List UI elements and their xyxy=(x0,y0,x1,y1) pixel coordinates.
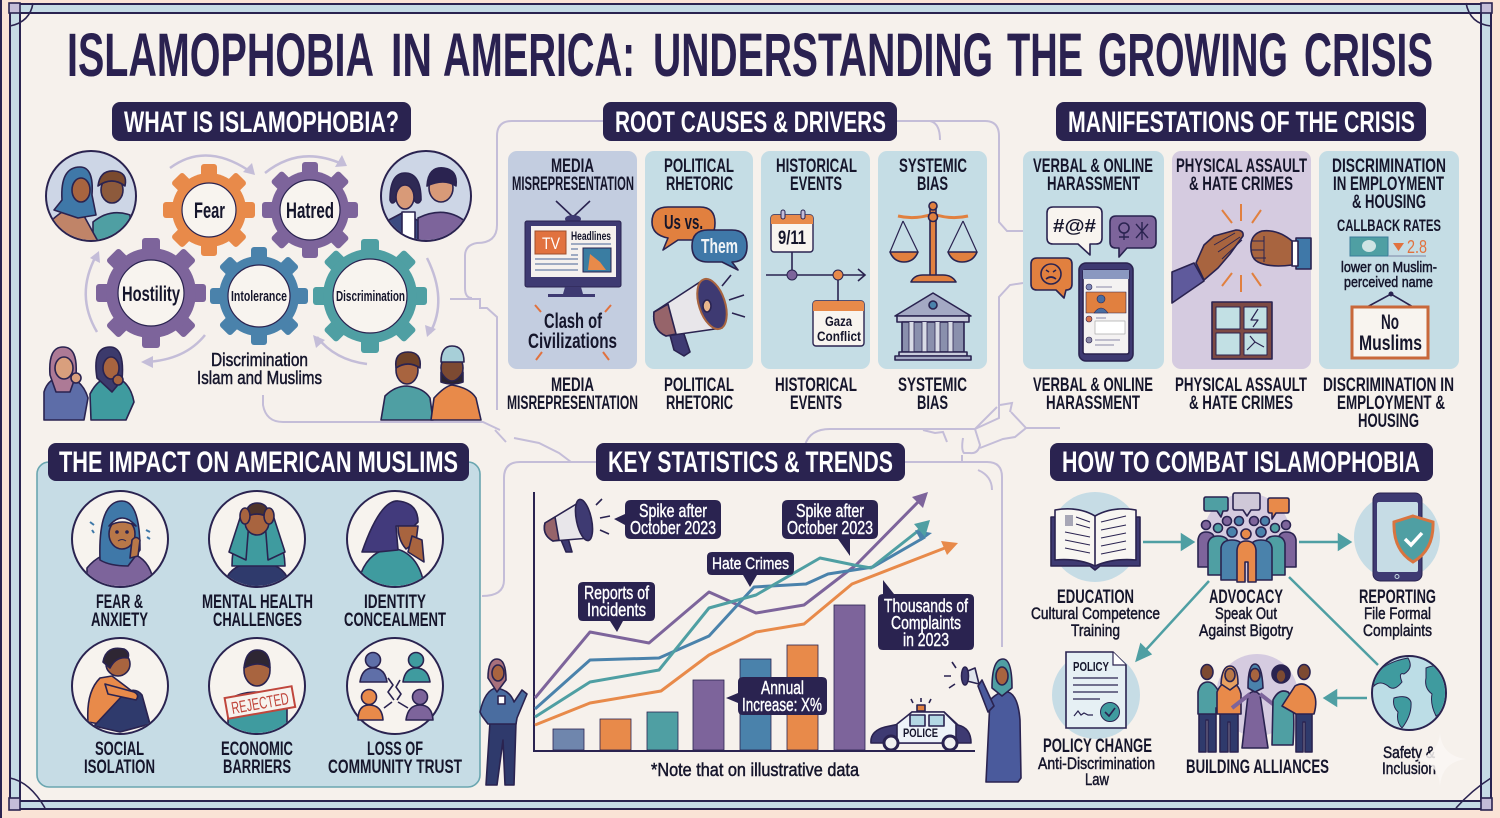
gear: discrimination xyxy=(313,239,427,353)
captions under root causes: MEDIA xyxy=(551,375,594,396)
gear: hatred xyxy=(262,162,358,258)
definition text xyxy=(197,349,322,388)
callout: reports of incidents: Reports of xyxy=(584,583,650,603)
captions under manifestations: DISCRIMINATION IN xyxy=(1323,375,1454,396)
panel: verbal and online harassment: VERBAL & ONLINE xyxy=(1033,156,1153,177)
callback rate figure xyxy=(1350,237,1427,257)
callout: spike right xyxy=(782,500,878,556)
captions under root causes: BIAS xyxy=(917,393,948,414)
panel: historical events: EVENTS xyxy=(790,174,842,195)
title: IN xyxy=(391,21,432,89)
figure: woman with megaphone xyxy=(944,659,1021,782)
captions under root causes: EVENTS xyxy=(790,393,842,414)
timeline with dates: Gaza xyxy=(825,313,852,329)
gear: intolerance: Intolerance xyxy=(231,289,287,305)
icon: courthouse xyxy=(895,293,971,360)
callout: spike left: October 2023 xyxy=(630,518,716,538)
icon: advocacy crowd: Speak Out xyxy=(1215,604,1277,623)
panel: political rhetoric: POLITICAL xyxy=(664,156,734,177)
icon: policy document: POLICY CHANGE xyxy=(1043,736,1152,757)
captions under manifestations: HARASSMENT xyxy=(1046,393,1140,414)
panel: political rhetoric xyxy=(645,151,753,369)
icon: broken window xyxy=(1212,302,1272,359)
item: identity concealment xyxy=(344,491,446,631)
item: social isolation: SOCIAL xyxy=(95,739,144,760)
item: loss of community trust: COMMUNITY TRUST xyxy=(328,757,462,778)
panel: systemic bias xyxy=(878,151,987,369)
panel: discrimination in employment and housing: lower on Muslim- xyxy=(1341,259,1437,276)
panel: systemic bias: BIAS xyxy=(917,174,948,195)
figures: two men xyxy=(381,346,481,420)
panel: discrimination in employment and housing xyxy=(1319,151,1459,369)
header: what is islamophobia xyxy=(112,102,411,141)
icon: advocacy crowd: ADVOCACY xyxy=(1209,587,1283,608)
captions under manifestations: VERBAL & ONLINE xyxy=(1033,375,1153,396)
panel: media misrepresentation xyxy=(508,151,637,369)
callout: reports of incidents xyxy=(578,582,655,632)
captions under manifestations: & HATE CRIMES xyxy=(1189,393,1293,414)
item: fear and anxiety: ANXIETY xyxy=(91,610,148,631)
timeline with dates: Conflict xyxy=(817,328,861,344)
callout: annual increase: Annual xyxy=(761,678,804,698)
header: root causes xyxy=(603,102,897,141)
callout: annual increase xyxy=(726,677,827,715)
icon: speech bubbles xyxy=(1031,207,1156,298)
panel: physical assault and hate crimes: & HATE CRIMES xyxy=(1189,174,1293,195)
callout: annual increase: Increase: X% xyxy=(742,695,822,715)
icon: policy document: Anti-Discrimination xyxy=(1038,754,1155,773)
panel: discrimination in employment and housing: & HOUSING xyxy=(1352,192,1426,213)
icon: reporting phone xyxy=(1354,493,1440,640)
item: fear and anxiety: FEAR & xyxy=(96,592,143,613)
bars xyxy=(553,605,865,750)
item: mental health challenges xyxy=(202,491,313,631)
panel: discrimination in employment and housing: perceived name xyxy=(1344,274,1433,291)
timeline with dates: 9/11 xyxy=(778,228,806,249)
icon: us vs them bubbles: Us vs. xyxy=(664,212,703,234)
gear: fear: Fear xyxy=(194,198,225,223)
panel: media misrepresentation: Civilizations xyxy=(528,330,617,353)
item: economic barriers: REJECTED xyxy=(230,689,290,718)
panel: verbal and online harassment xyxy=(1023,151,1164,369)
captions under manifestations: PHYSICAL ASSAULT xyxy=(1175,375,1307,396)
icon: reporting phone: File Formal xyxy=(1364,604,1431,623)
icon: megaphone xyxy=(654,275,745,356)
gear: hostility xyxy=(96,238,206,348)
icon: education book: EDUCATION xyxy=(1057,587,1134,608)
icon: advocacy crowd: Against Bigotry xyxy=(1199,621,1293,640)
panel: discrimination in employment and housing: IN EMPLOYMENT xyxy=(1333,174,1444,195)
icon: building alliances xyxy=(1186,654,1329,778)
captions under manifestations: HOUSING xyxy=(1358,411,1419,432)
icon: no muslims sign: No xyxy=(1381,311,1399,334)
trend lines xyxy=(535,492,958,725)
item: loss of community trust: LOSS OF xyxy=(367,739,423,760)
gear: fear xyxy=(163,164,255,256)
connector lines xyxy=(263,121,1060,647)
panel: impact on american muslims xyxy=(37,443,480,787)
callout: hate crimes: Hate Crimes xyxy=(712,554,789,573)
callout: spike right: Spike after xyxy=(796,501,864,521)
chart: key statistics and trends xyxy=(480,492,1021,785)
title: THE xyxy=(1007,21,1083,89)
axes xyxy=(534,492,975,751)
captions under root causes: HISTORICAL xyxy=(775,375,857,396)
panel: how to combat xyxy=(1031,492,1466,789)
icon: policy document: POLICY xyxy=(1073,660,1110,674)
icon: no muslims sign: Muslims xyxy=(1359,332,1422,355)
icon: no muslims sign xyxy=(1352,292,1428,358)
icon: globe: Safety & xyxy=(1383,743,1436,762)
panel: discrimination in employment and housing: DISCRIMINATION xyxy=(1332,156,1446,177)
captions under root causes: MISREPRESENTATION xyxy=(507,393,638,414)
icon: policy document: Law xyxy=(1085,770,1110,789)
item: social isolation: ISOLATION xyxy=(84,757,155,778)
captions under root causes: POLITICAL xyxy=(664,375,734,396)
callout: thousands of complaints: Complaints xyxy=(891,613,961,633)
callout: thousands of complaints: in 2023 xyxy=(903,630,949,650)
icon: police car xyxy=(871,698,971,750)
icon: globe xyxy=(1372,656,1448,778)
callout: spike left xyxy=(614,500,721,539)
figure: woman with phone xyxy=(480,659,527,785)
panel: discrimination in employment and housing: CALLBACK RATES xyxy=(1337,216,1441,235)
captions under root causes xyxy=(507,375,967,414)
icon: reporting phone: Complaints xyxy=(1363,621,1432,640)
callback rate figure: 2.8 xyxy=(1407,237,1427,257)
gear: discrimination: Discrimination xyxy=(336,289,405,305)
title xyxy=(67,21,1433,89)
captions under manifestations xyxy=(1033,375,1454,432)
callout: spike left: Spike after xyxy=(639,501,707,521)
portrait: couple xyxy=(381,151,471,247)
callout: spike right: October 2023 xyxy=(787,518,873,538)
icon: education book xyxy=(1031,492,1160,640)
panel: political rhetoric: RHETORIC xyxy=(666,174,733,195)
item: mental health challenges: MENTAL HEALTH xyxy=(202,592,313,613)
sparkle watermark xyxy=(1414,733,1466,786)
item: social isolation xyxy=(72,638,168,778)
captions under root causes: SYSTEMIC xyxy=(898,375,967,396)
note: *Note that on illustrative data xyxy=(651,759,860,780)
icon: megaphone small xyxy=(544,498,610,552)
icon: hand and fist xyxy=(1172,230,1311,303)
item: loss of community trust xyxy=(328,638,462,778)
definition text: Discrimination xyxy=(211,349,308,370)
panel: systemic bias: SYSTEMIC xyxy=(899,156,967,177)
item: identity concealment: IDENTITY xyxy=(364,592,426,613)
icon: education book: Cultural Competence xyxy=(1031,604,1160,623)
item: identity concealment: CONCEALMENT xyxy=(344,610,446,631)
panel: verbal and online harassment: HARASSMENT xyxy=(1047,174,1140,195)
icon: reporting phone: REPORTING xyxy=(1359,587,1436,608)
title: GROWING xyxy=(1098,21,1288,89)
icon: television: TV xyxy=(542,234,561,253)
callout: thousands of complaints xyxy=(878,580,974,650)
captions under root causes: RHETORIC xyxy=(666,393,733,414)
item: economic barriers: BARRIERS xyxy=(223,757,291,778)
icon: television: Headlines xyxy=(571,231,611,243)
timeline with dates xyxy=(766,210,865,346)
panel: media misrepresentation: MEDIA xyxy=(551,156,594,177)
icon: scales of justice xyxy=(890,202,977,282)
gear: intolerance xyxy=(210,247,308,345)
icon: building alliances: BUILDING ALLIANCES xyxy=(1186,757,1329,778)
icon: speech bubbles: #@# xyxy=(1053,216,1096,236)
callout: thousands of complaints: Thousands of xyxy=(884,596,969,616)
icon: police car: POLICE xyxy=(903,726,938,740)
gear: hostility: Hostility xyxy=(122,283,180,306)
panel: what is islamophobia xyxy=(44,151,481,420)
icon: education book: Training xyxy=(1071,621,1120,640)
icon: us vs them bubbles: Them xyxy=(701,236,738,258)
captions under manifestations: EMPLOYMENT & xyxy=(1337,393,1445,414)
header: key statistics: KEY STATISTICS & TRENDS xyxy=(608,446,893,479)
portrait: worried woman and boy xyxy=(46,151,136,245)
panel: physical assault and hate crimes: PHYSICAL ASSAULT xyxy=(1176,156,1307,177)
figures: two thoughtful women xyxy=(44,347,134,420)
header: impact: THE IMPACT ON AMERICAN MUSLIMS xyxy=(59,446,458,479)
callout: reports of incidents: Incidents xyxy=(587,600,646,620)
item: economic barriers xyxy=(209,638,305,778)
icon: globe: Inclusion xyxy=(1382,759,1436,778)
header: what is islamophobia: WHAT IS ISLAMOPHOBIA? xyxy=(124,106,399,139)
item: mental health challenges: CHALLENGES xyxy=(213,610,302,631)
icon: policy document xyxy=(1038,651,1155,789)
title: AMERICA: xyxy=(443,21,635,89)
icon: advocacy crowd xyxy=(1198,493,1296,640)
header: impact xyxy=(48,443,469,481)
item: economic barriers: ECONOMIC xyxy=(221,739,293,760)
header: root causes: ROOT CAUSES & DRIVERS xyxy=(615,106,886,139)
panel: historical events: HISTORICAL xyxy=(776,156,857,177)
gear: hatred: Hatred xyxy=(286,198,334,223)
icon: us vs them bubbles xyxy=(652,207,747,270)
arrows xyxy=(1137,535,1378,705)
panel: media misrepresentation: Clash of xyxy=(544,310,603,333)
title: ISLAMOPHOBIA xyxy=(67,21,374,89)
cycle arrows xyxy=(86,155,438,368)
icon: television xyxy=(525,201,621,297)
definition text: Islam and Muslims xyxy=(197,367,322,388)
callout: hate crimes xyxy=(707,552,794,587)
item: fear and anxiety xyxy=(72,491,168,631)
header: key statistics xyxy=(596,443,905,481)
panel: historical events xyxy=(761,151,870,369)
title: UNDERSTANDING xyxy=(653,21,993,89)
panel: physical assault and hate crimes xyxy=(1172,151,1311,369)
icon: smartphone xyxy=(1079,263,1133,361)
panel: media misrepresentation: MISREPRESENTATION xyxy=(512,174,634,195)
